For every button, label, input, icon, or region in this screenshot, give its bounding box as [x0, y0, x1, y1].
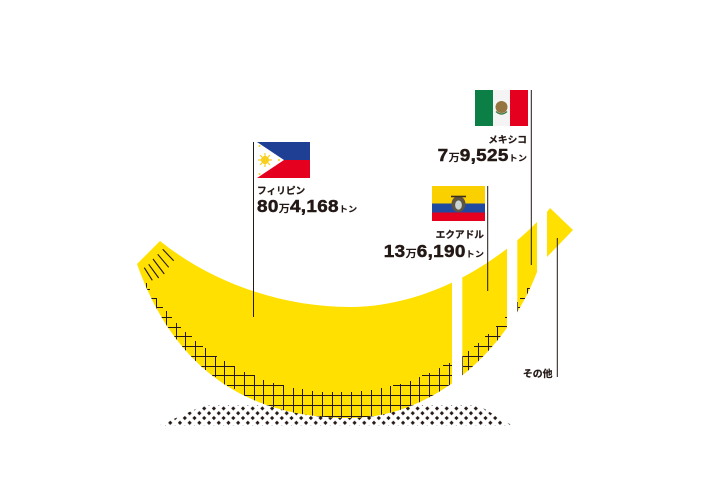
flag: Philippines	[257, 142, 310, 178]
label: Ecuador	[384, 186, 488, 291]
volume: Philippines: 80万4,168トン	[257, 197, 357, 216]
leader line: Philippines	[252, 142, 254, 317]
leader line: Ecuador	[487, 186, 489, 291]
volume: Ecuador: 13万6,190トン	[384, 242, 484, 261]
banana crosshatch texture	[145, 283, 532, 420]
banana end stripes	[144, 249, 174, 280]
leader line: others	[556, 238, 558, 377]
country name: Philippines: フィリピン	[257, 183, 306, 197]
gaps between banana segments	[452, 235, 517, 392]
volume: Mexico: 7万9,525トン	[438, 146, 527, 165]
flag: Mexico	[475, 90, 528, 126]
banana tip: others share	[547, 208, 573, 257]
flag: Ecuador	[432, 186, 485, 221]
label: Mexico	[438, 90, 531, 265]
banana body chart	[137, 208, 573, 420]
banana body	[137, 222, 537, 418]
text: others: その他	[523, 366, 553, 380]
country name: Mexico: メキシコ	[488, 132, 527, 146]
country name: Ecuador: エクアドル	[436, 227, 484, 241]
label: Philippines	[254, 142, 357, 317]
leader line: Mexico	[530, 90, 532, 265]
dotted ground shadow	[158, 405, 513, 426]
